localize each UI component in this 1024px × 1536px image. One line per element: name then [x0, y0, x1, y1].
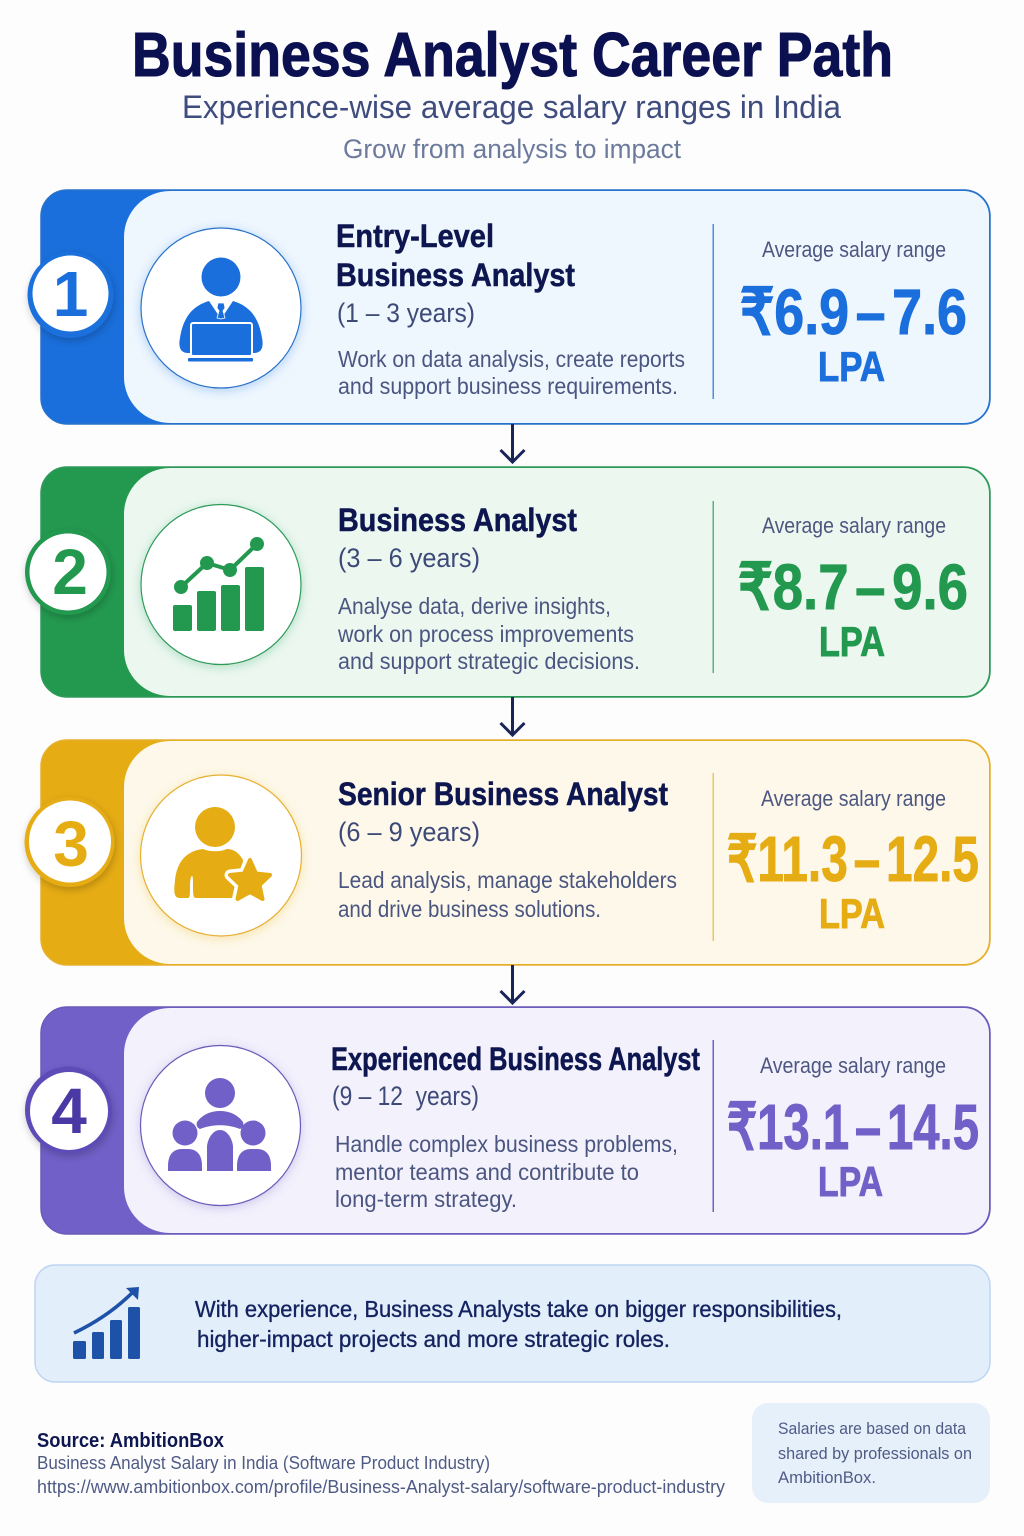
panel: step 1 entry-level business analyst: [28, 190, 990, 424]
source citation: https://www.ambitionbox.com/profile/Business-Analyst-salary/software-product-industry: [37, 1477, 725, 1497]
icon: analyst with laptop: [141, 228, 301, 388]
callout text: [195, 1296, 842, 1352]
role heading: Business Analyst: [338, 502, 577, 538]
salary range: Average salary range: [762, 237, 946, 262]
source citation: [37, 1430, 725, 1497]
description: Analyse data, derive insights,: [338, 593, 611, 619]
salary range: LPA: [819, 890, 885, 937]
tagline: Grow from analysis to impact: [343, 134, 681, 164]
salary range: Average salary range: [762, 513, 946, 538]
role heading: Business Analyst: [336, 257, 575, 293]
panel: step 4 experienced business analyst: [25, 1007, 990, 1234]
description: work on process improvements: [337, 621, 634, 647]
step number badge 3: 3: [53, 808, 89, 880]
icon: growth chart: [141, 504, 301, 664]
arrow: step 1 to 2: [500, 424, 524, 462]
salary range: LPA: [818, 343, 885, 390]
icon: rising bars with arrow: [73, 1287, 140, 1359]
salary range: Average salary range: [761, 786, 946, 811]
step number badge 1: 1: [53, 258, 88, 330]
callout: career growth summary: [35, 1265, 990, 1382]
experience years: (6 – 9 years): [338, 817, 480, 847]
subtitle: Experience-wise average salary ranges in India: [182, 89, 841, 125]
role heading: Experienced Business Analyst: [331, 1041, 700, 1077]
salary range: [738, 513, 968, 665]
arrow: step 2 to 3: [500, 697, 524, 735]
source citation: Source: AmbitionBox: [37, 1430, 224, 1452]
description: [337, 593, 640, 674]
description: [338, 346, 685, 399]
experience years: (3 – 6 years): [338, 543, 480, 573]
description: and drive business solutions.: [338, 896, 601, 922]
icon: team group: [140, 1046, 300, 1206]
role heading: Senior Business Analyst: [338, 776, 668, 812]
step number badge 1: [28, 252, 114, 338]
title: Business Analyst Career Path: [132, 21, 893, 90]
step number badge 2: [25, 529, 111, 615]
description: Lead analysis, manage stakeholders: [338, 867, 677, 893]
arrow: step 3 to 4: [500, 965, 524, 1003]
role heading: Entry-Level: [336, 218, 494, 254]
role heading: [336, 218, 575, 293]
description: [335, 1131, 678, 1212]
description: and support strategic decisions.: [338, 648, 640, 674]
source citation: Business Analyst Salary in India (Software Product Industry): [37, 1453, 490, 1473]
panel: step 2 business analyst: [25, 467, 990, 697]
salary range: [727, 786, 979, 937]
callout text: higher-impact projects and more strategic roles.: [197, 1326, 670, 1352]
salary range: Average salary range: [760, 1053, 946, 1078]
description: long-term strategy.: [335, 1186, 517, 1212]
panel: step 3 senior business analyst: [24, 740, 990, 965]
step number badge 4: 4: [51, 1075, 87, 1147]
description: and support business requirements.: [338, 373, 678, 399]
description: mentor teams and contribute to: [335, 1159, 639, 1185]
experience years: (1 – 3 years): [337, 298, 475, 328]
salary range: [740, 237, 967, 390]
salary range: [727, 1053, 979, 1205]
note: data disclaimer: shared by professionals on: [778, 1444, 972, 1463]
salary range: ₹6.9 – 7.6: [740, 276, 967, 348]
icon: person with star: [140, 775, 302, 936]
callout text: With experience, Business Analysts take on bigger responsibilities,: [195, 1296, 842, 1322]
step number badge 4: [25, 1066, 112, 1154]
note: data disclaimer: Salaries are based on data: [778, 1419, 966, 1438]
salary range: ₹8.7 – 9.6: [738, 551, 968, 623]
note: data disclaimer: AmbitionBox.: [778, 1468, 876, 1487]
description: Handle complex business problems,: [335, 1131, 678, 1157]
experience years: (9 – 12 years): [332, 1081, 479, 1111]
description: Work on data analysis, create reports: [338, 346, 685, 372]
step number badge 3: [24, 797, 114, 887]
description: [338, 867, 677, 922]
step number badge 2: 2: [52, 536, 88, 608]
note: data disclaimer: [752, 1403, 990, 1503]
salary range: LPA: [819, 618, 885, 665]
salary range: LPA: [818, 1158, 883, 1205]
